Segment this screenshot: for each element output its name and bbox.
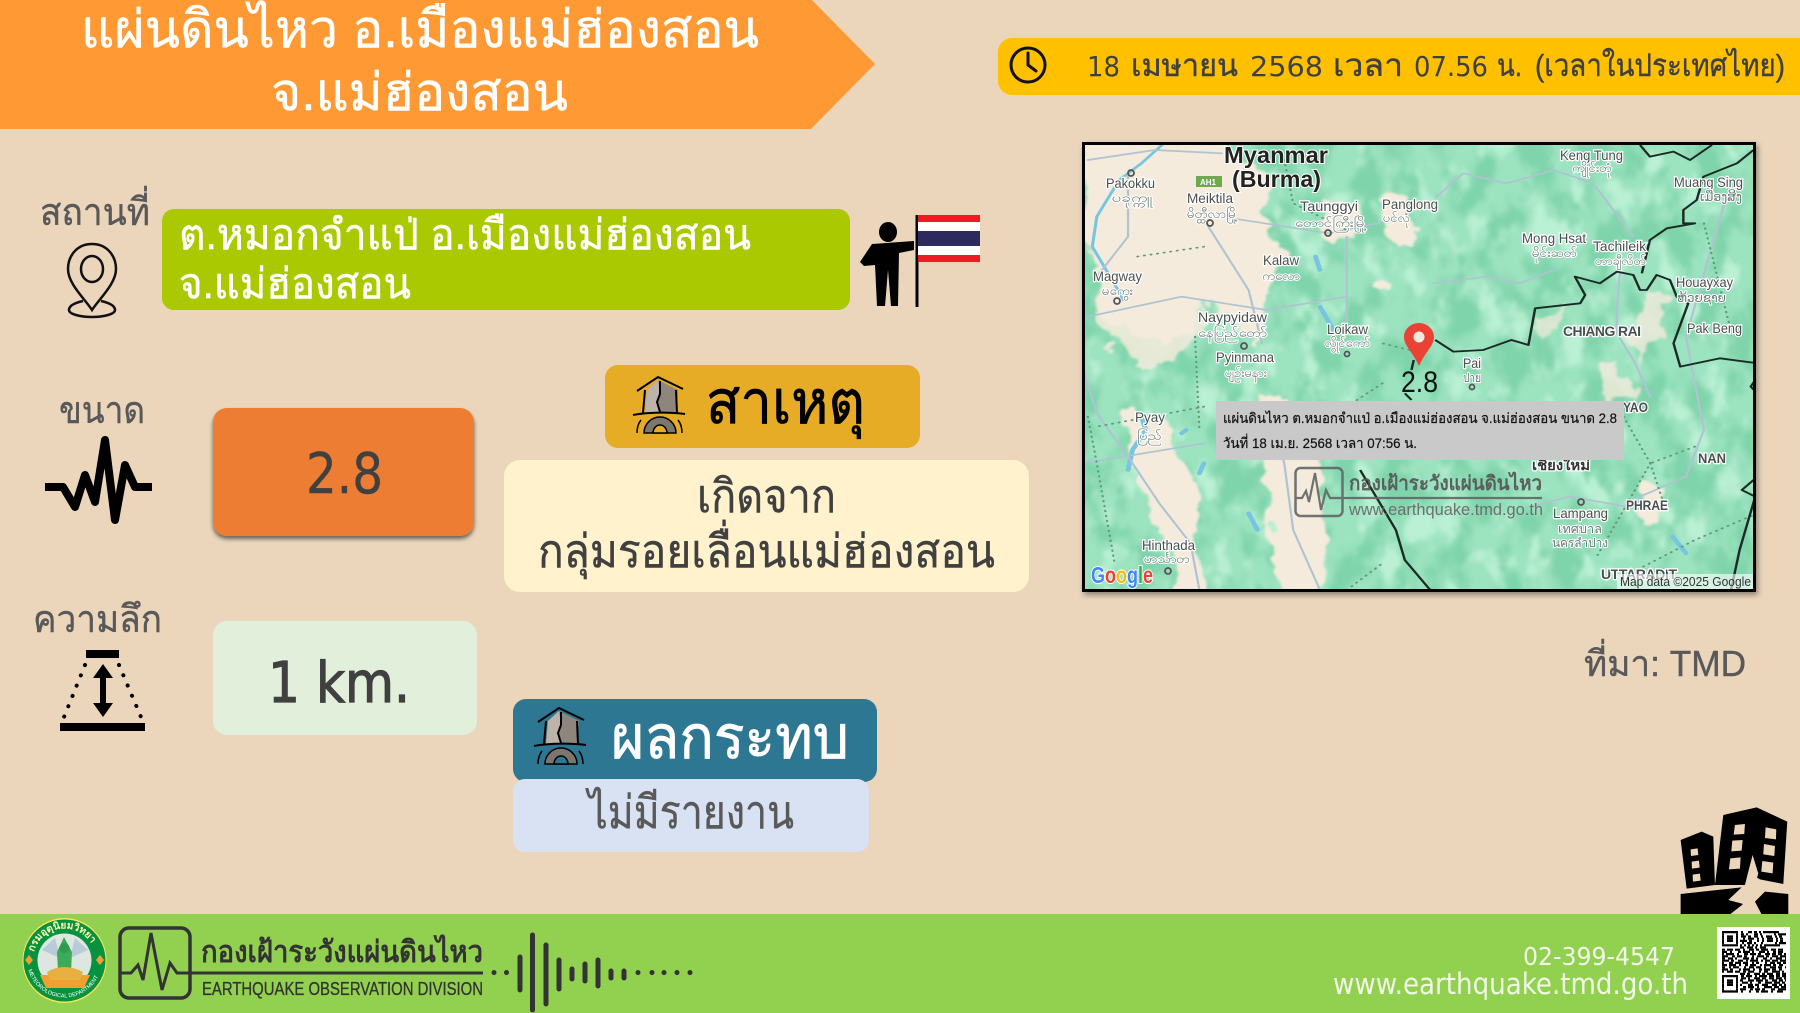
icon: seismic wave — [45, 440, 152, 520]
map watermark: กองเฝ้าระวังแผ่นดินไหว — [1349, 471, 1542, 495]
impact heading: ผลกระทบ — [611, 704, 849, 771]
map labels: မကွေး — [1102, 284, 1133, 301]
map labels: Naypyidaw — [1198, 309, 1268, 325]
icon: clock — [1011, 48, 1045, 82]
icon: sound wave — [494, 935, 690, 1010]
icon: person with Thai flag — [860, 215, 980, 307]
country border — [1360, 145, 1757, 592]
cause heading — [605, 365, 920, 448]
map labels: เชียงใหม่ — [1532, 456, 1590, 473]
map labels: မိတ္ထီလာမြို့ — [1187, 205, 1238, 224]
website address: www.earthquake.tmd.go.th — [1333, 967, 1688, 1001]
date and time bar — [998, 38, 1800, 95]
icon: cracked house — [534, 708, 586, 764]
map labels: ဟင်္သာတ — [1144, 551, 1190, 566]
title banner — [0, 0, 875, 129]
date and time text: 18 — [1087, 50, 1120, 83]
map labels: CHIANG RAI — [1563, 323, 1641, 339]
cause heading: สาเหตุ — [706, 369, 865, 439]
map labels: PHRAE — [1626, 497, 1668, 513]
date and time text — [1087, 48, 1785, 83]
map labels: นครลำปาง — [1552, 536, 1608, 550]
map labels: ကျိုင်းတုံ — [1572, 160, 1612, 178]
city markers — [1114, 170, 1584, 574]
map labels: လွိုင်ကော် — [1325, 335, 1370, 353]
map labels: Loikaw — [1327, 321, 1369, 337]
map labels: Panglong — [1382, 196, 1438, 212]
icon: collapsed buildings — [1681, 807, 1788, 914]
magnitude on map: 2.8 — [1401, 366, 1438, 399]
map labels: NAN — [1698, 450, 1726, 466]
location label: สถานที่ — [40, 186, 150, 234]
map labels: Pak Beng — [1687, 320, 1742, 336]
impact text panel: ไม่มีรายงาน — [585, 786, 794, 838]
map pin — [1404, 323, 1434, 366]
map labels: Mong Hsat — [1522, 230, 1586, 246]
title banner: จ.แม่ฮ่องสอน — [271, 64, 568, 122]
map labels: Pai — [1463, 355, 1481, 371]
map labels: เทศบาล — [1558, 522, 1602, 536]
map labels: ပျဉ်းမနား — [1225, 365, 1267, 383]
depth value panel — [213, 621, 477, 735]
cause text panel: เกิดจาก — [697, 470, 836, 522]
map labels: နေပြည်တော် — [1198, 324, 1267, 343]
epicentre map — [1079, 140, 1757, 597]
map labels: Hinthada — [1142, 537, 1195, 553]
QR code — [1717, 927, 1790, 999]
depth value panel: 1 km. — [268, 651, 410, 716]
location panel: จ.แม่ฮ่องสอน — [179, 260, 411, 307]
cause text panel — [504, 460, 1029, 592]
map labels: Houayxay — [1676, 274, 1733, 290]
map labels: ปาย — [1463, 371, 1481, 385]
date and time text: เวลา — [1333, 48, 1403, 83]
map labels: Meiktila — [1187, 190, 1233, 206]
map labels: Keng Tung — [1560, 147, 1623, 163]
date and time text: 2568 — [1250, 50, 1323, 83]
map land areas — [1079, 140, 1668, 597]
map popup: แผ่นดินไหว ต.หมอกจำแป่ อ.เมืองแม่ฮ่องสอน จ.แม่ฮ่องสอน ขนาด 2.8 — [1223, 410, 1617, 426]
map labels: Myanmar — [1224, 142, 1328, 168]
map labels: တာချီလိတ် — [1595, 253, 1646, 271]
map labels: Magway — [1093, 268, 1142, 284]
map labels: ເມືອງສິງ — [1700, 189, 1742, 204]
title banner: แผ่นดินไหว อ.เมืองแม่ฮ่องสอน — [81, 0, 759, 59]
date and time text: น. — [1497, 48, 1522, 83]
cause text panel: กลุ่มรอยเลื่อนแม่ฮ่องสอน — [538, 519, 995, 580]
map labels: (Burma) — [1232, 166, 1321, 192]
map attribution: Map data ©2025 Google — [1620, 575, 1751, 589]
depth label: ความลึก — [33, 599, 162, 641]
map popup — [1216, 401, 1624, 460]
rivers and roads — [1083, 143, 1757, 590]
map labels: Lampang — [1553, 505, 1608, 521]
map labels: Kalaw — [1263, 252, 1300, 268]
date and time text: เมษายน — [1131, 48, 1238, 83]
earthquake observation division logo — [120, 928, 483, 999]
location panel: ต.หมอกจำแป่ อ.เมืองแม่ฮ่องสอน — [179, 211, 751, 258]
magnitude value panel: 2.8 — [306, 442, 383, 507]
map labels: Pyay — [1135, 409, 1165, 425]
footer band — [0, 914, 1800, 1013]
map labels: Muang Sing — [1674, 174, 1743, 190]
google logo: Google — [1091, 562, 1153, 588]
impact heading — [513, 699, 877, 782]
icon: cracked house — [633, 377, 685, 433]
map watermark — [1296, 468, 1543, 519]
date and time text: 07.56 — [1414, 50, 1488, 83]
icon: depth — [60, 650, 145, 731]
map labels: UTTARADIT — [1601, 566, 1677, 582]
meteorological department seal: กรมอุตุนิยมวิทยา — [29, 921, 95, 952]
meteorological department seal — [22, 918, 106, 1003]
map labels: ပင်လုံ — [1383, 210, 1410, 228]
map labels — [1093, 142, 1743, 582]
map labels: ပြည် — [1137, 427, 1162, 446]
map labels: တောင်ကြီးမြို့ — [1295, 214, 1367, 233]
map labels: ကလော — [1262, 269, 1300, 283]
impact text panel — [513, 779, 869, 852]
map labels: မိုင်းဆတ် — [1532, 245, 1577, 263]
earthquake observation division logo: กองเฝ้าระวังแผ่นดินไหว — [201, 934, 483, 969]
contact phone: 02-399-4547 — [1523, 942, 1675, 971]
icon: location pin — [68, 244, 116, 317]
map labels: ຫ້ວຍຊາຍ — [1677, 290, 1726, 305]
map popup: วันที่ 18 เม.ย. 2568 เวลา 07:56 น. — [1223, 434, 1417, 451]
map labels: Pakokku — [1106, 175, 1155, 191]
map labels: ပခုက္ကူ — [1112, 191, 1153, 208]
magnitude value panel — [213, 408, 474, 536]
map labels: Taunggyi — [1300, 198, 1358, 214]
map watermark: www.earthquake.tmd.go.th — [1348, 500, 1543, 519]
meteorological department seal: METEOROLOGICAL DEPARTMENT — [28, 969, 98, 998]
map labels: Pyinmana — [1216, 349, 1274, 365]
map labels: AH1 — [1200, 178, 1217, 187]
location panel — [162, 209, 850, 310]
map labels: YAO — [1623, 399, 1648, 415]
magnitude label: ขนาด — [59, 390, 145, 432]
map labels: Tachileik — [1593, 238, 1647, 254]
earthquake observation division logo: EARTHQUAKE OBSERVATION DIVISION — [202, 979, 483, 999]
source credit: ที่มา: TMD — [1584, 639, 1746, 684]
